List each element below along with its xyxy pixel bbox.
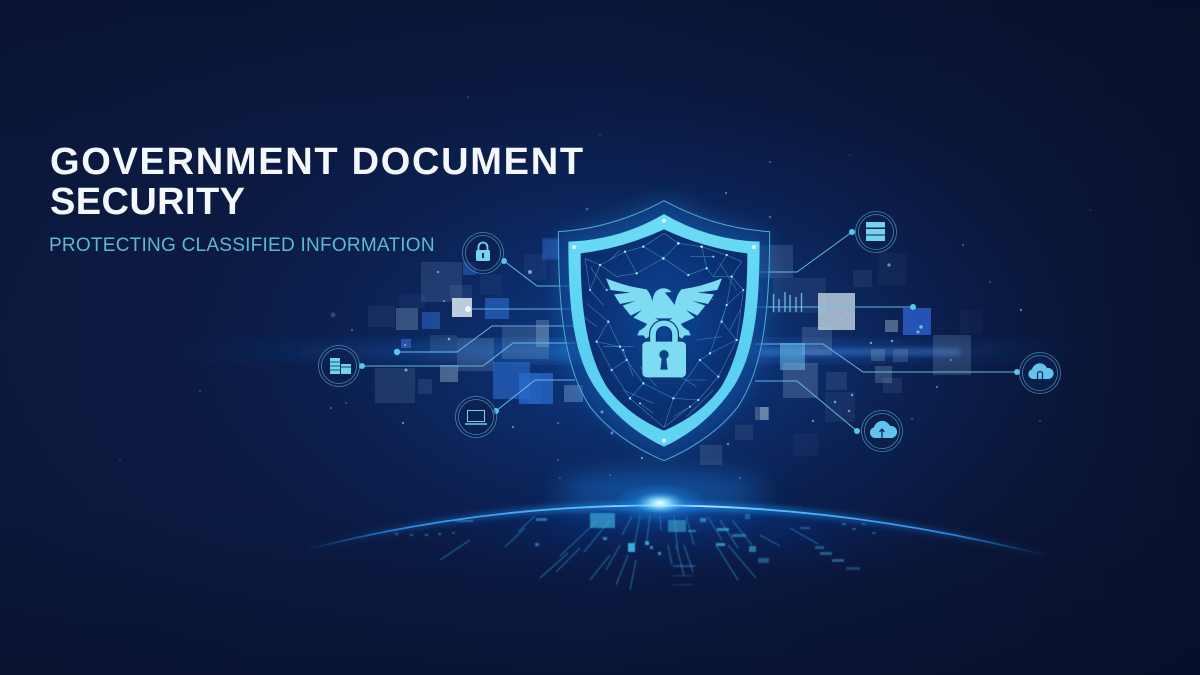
shield inner panel [581,229,747,431]
security shield [558,201,770,461]
shield cyan band [568,214,760,447]
title: GOVERNMENT DOCUMENT [50,141,585,183]
circuit connector lines [362,232,1017,431]
eagle emblem [606,278,722,339]
padlock emblem [642,323,686,377]
polygon mesh network [583,233,743,427]
translucent data squares: left [368,238,583,404]
eagle right wing [672,278,722,324]
floating particles [119,96,1091,479]
shield thin outer outline [558,201,770,461]
mesh nodes [589,242,744,408]
icon: cloud node right [1020,352,1060,394]
subtitle: PROTECTING CLASSIFIED INFORMATION [49,235,435,256]
shield glow [565,205,763,450]
bar chart icon [774,292,802,312]
eagle left wing [606,278,656,324]
eagle talons [637,316,691,339]
connector end dots [359,229,1020,434]
icon: server and window node [318,346,360,386]
highlighted white data squares [452,293,855,330]
translucent data squares: right [543,240,982,465]
horizon flare [614,483,706,523]
icon: laptop node [456,396,496,438]
icon: cloud node lower [862,410,902,452]
icon: padlock node [462,232,504,274]
eagle head and body [652,288,676,318]
shield corner studs [572,219,756,443]
glowing horizon arc [305,505,1048,556]
icon: server rack node [856,212,896,252]
planet horizon [305,472,1050,675]
circuit city pattern [395,513,876,590]
title: SECURITY [50,181,245,223]
horizontal light streak [170,344,1070,358]
